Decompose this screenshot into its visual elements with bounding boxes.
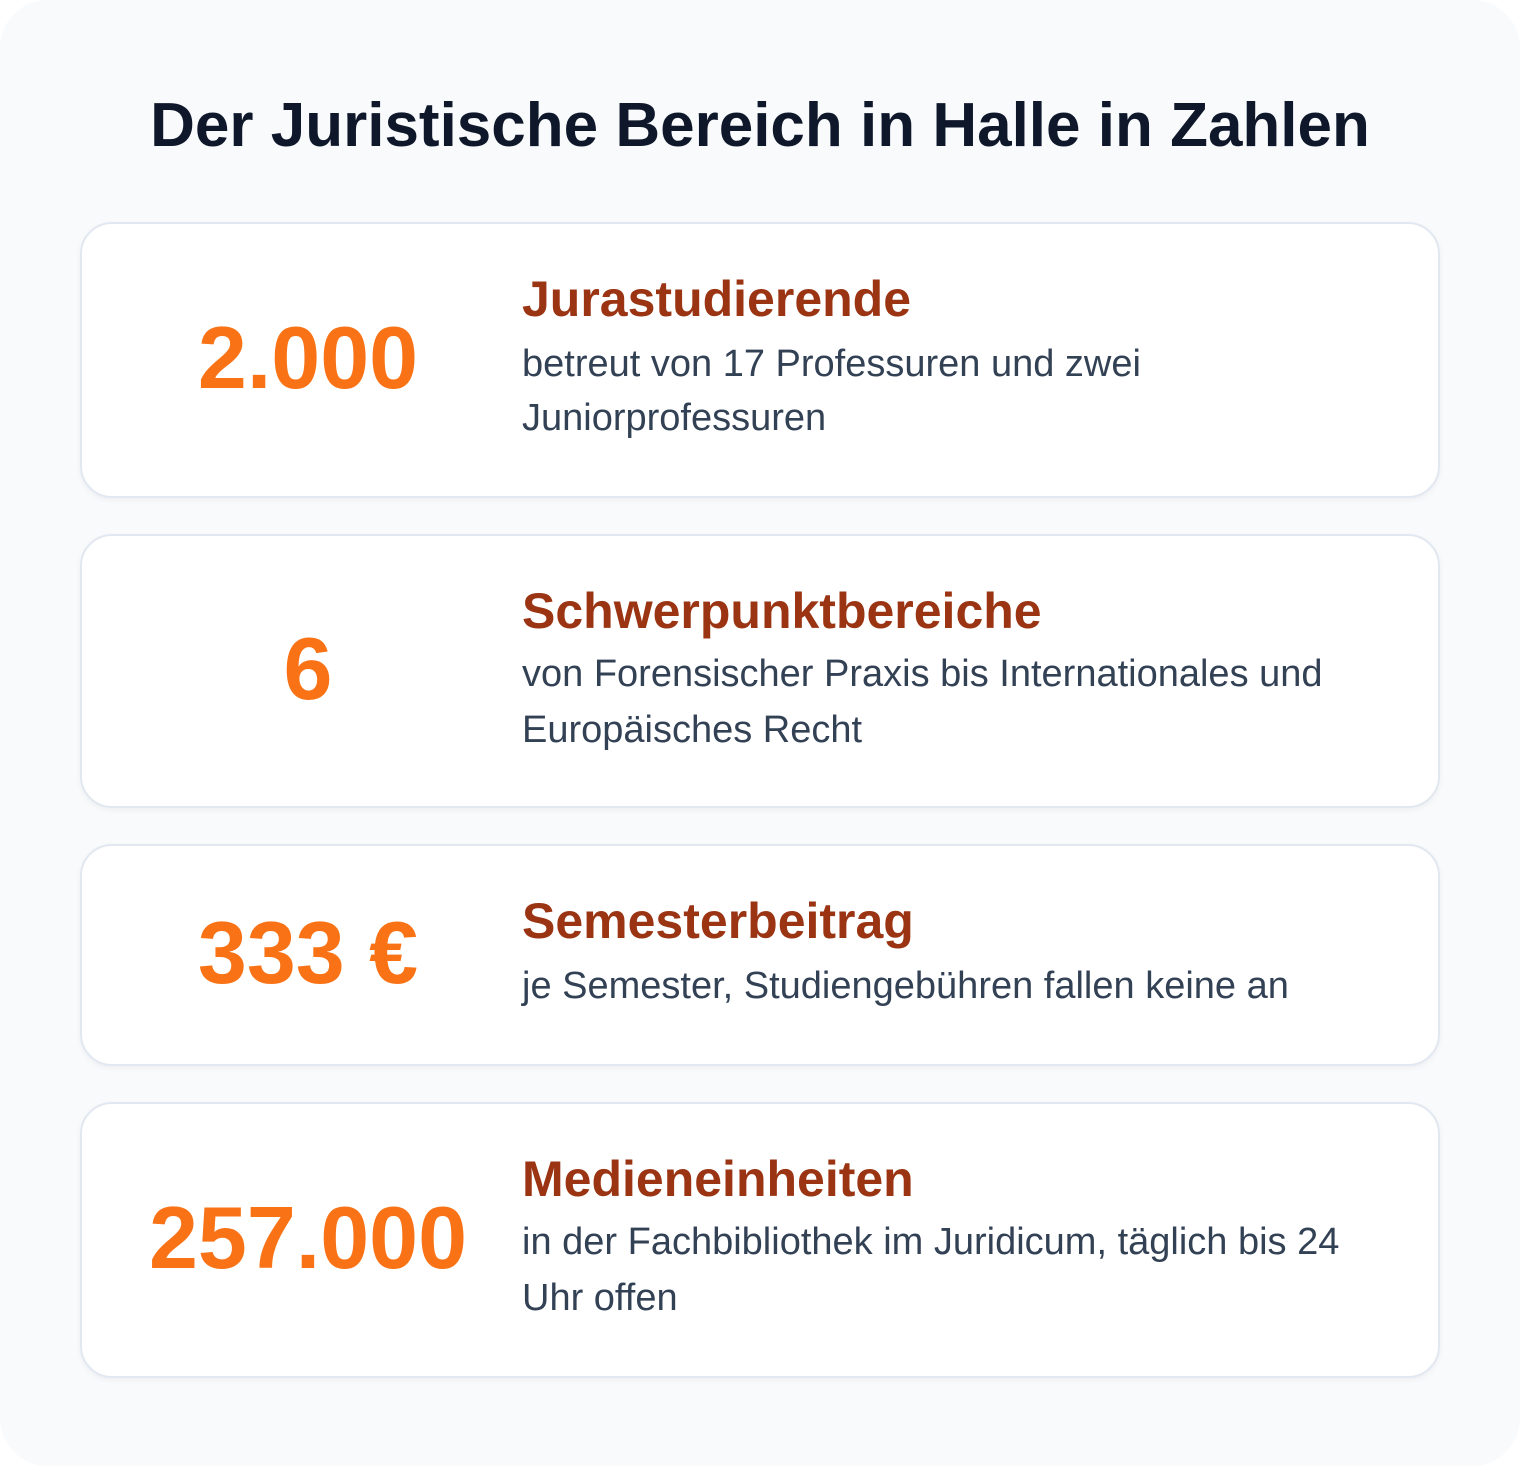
heading: Jurastudierende: Jurastudierende bbox=[522, 271, 911, 327]
number: 2.000: 2.000 bbox=[198, 308, 418, 407]
panel text: Medieneinheiten bbox=[522, 1151, 1339, 1319]
description: Fachbibliothek: in der Fachbibliothek im Juridicum, täglich bis 24 bbox=[522, 1221, 1339, 1263]
panel text: Schwerpunktbereiche bbox=[522, 583, 1323, 751]
description: Professuren bbox=[522, 343, 1141, 439]
panel: Medieneinheiten bbox=[80, 1102, 1440, 1378]
panel: Semesterbeitrag bbox=[80, 844, 1440, 1066]
description: Professuren: betreut von 17 Professuren und zwei bbox=[522, 343, 1141, 385]
description: Fachbibliothek bbox=[522, 1221, 1339, 1319]
description: Studiengebühren: je Semester, Studiengebühren fallen keine an bbox=[522, 965, 1289, 1007]
panel text: Semesterbeitrag bbox=[521, 893, 1289, 1007]
description: Professuren: Juniorprofessuren bbox=[522, 397, 826, 439]
description: Forensische Praxis: Europäisches Recht bbox=[522, 709, 862, 751]
number: 257.000: 257.000 bbox=[149, 1188, 467, 1287]
description: Forensische Praxis: von Forensischer Praxis bis Internationales und bbox=[522, 653, 1323, 695]
panel text: Jurastudierende bbox=[522, 271, 1141, 439]
panel: Jurastudierende bbox=[80, 222, 1440, 498]
heading: Medieneinheiten: Medieneinheiten bbox=[522, 1151, 914, 1207]
number: 333 €: 333 € bbox=[198, 903, 418, 1002]
heading: Schwerpunktbereiche: Schwerpunktbereiche bbox=[522, 583, 1042, 639]
heading: Semesterbeitrag: Semesterbeitrag bbox=[522, 893, 914, 949]
description: Forensische Praxis bbox=[522, 653, 1323, 751]
panel: Schwerpunktbereiche bbox=[80, 534, 1440, 808]
title: Der Juristische Bereich in Halle in Zahlen bbox=[150, 91, 1370, 160]
description: Fachbibliothek: Uhr offen bbox=[522, 1277, 678, 1319]
number: 6: 6 bbox=[284, 619, 332, 718]
